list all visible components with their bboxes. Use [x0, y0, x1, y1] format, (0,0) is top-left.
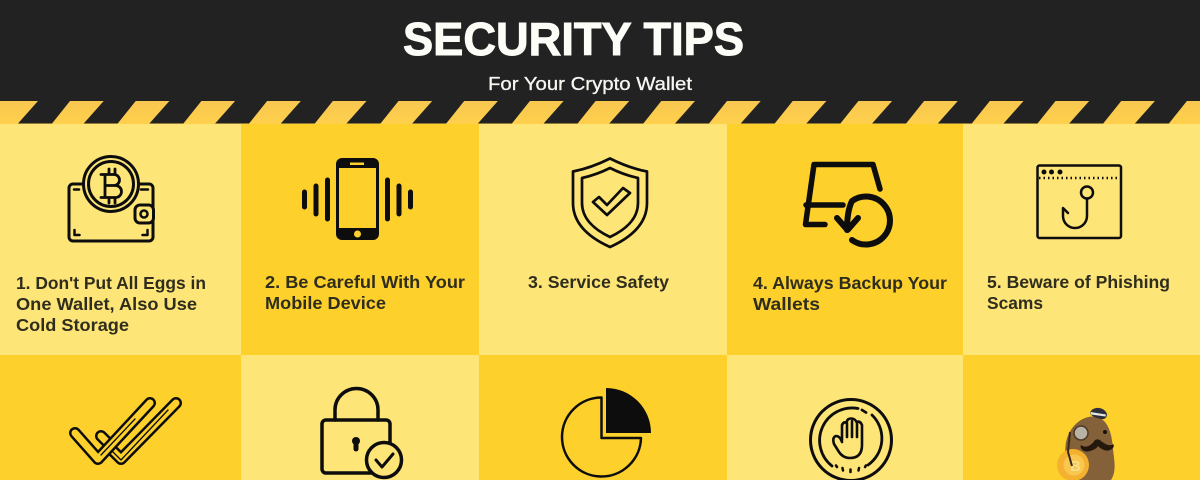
text: tip 1: One Wallet, Also Use	[16, 294, 197, 314]
panel: tip 4	[727, 124, 963, 355]
text: tip 2: Mobile Device	[265, 293, 386, 313]
hazard stripe band	[0, 101, 1200, 124]
text: tip 3: 3. Service Safety	[528, 272, 669, 292]
text: tip 5: Scams	[987, 293, 1043, 313]
panel: tip 1	[0, 124, 241, 355]
panel: tip 6	[0, 355, 241, 480]
text: tip 1	[16, 273, 206, 335]
panel: tip 8	[479, 355, 727, 480]
subtitle: For Your Crypto Wallet	[488, 73, 692, 94]
text: tip 1: 1. Don't Put All Eggs in	[16, 273, 206, 293]
panel: tip 7	[241, 355, 479, 480]
icon: phishing hook in browser window	[1038, 166, 1121, 238]
header band	[0, 0, 1200, 102]
icon: vibrating phone	[304, 158, 410, 240]
icon: pie chart	[562, 388, 651, 476]
icon: backup drive	[806, 164, 890, 245]
title: SECURITY TIPS	[403, 13, 744, 65]
icon: double check marks	[75, 403, 176, 460]
panel: tip 3	[479, 124, 727, 355]
icon: potato mascot with bitcoin	[1057, 408, 1115, 480]
panel: tip 5	[963, 124, 1200, 355]
text: tip 5	[987, 272, 1170, 313]
icon: bitcoin wallet	[69, 156, 154, 241]
text: tip 1: Cold Storage	[16, 315, 129, 335]
icon: stop hand in circle	[810, 400, 892, 480]
text: tip 2	[265, 272, 465, 313]
text: tip 4: Wallets	[753, 294, 820, 314]
panel: tip 10	[963, 355, 1200, 480]
panel: tip 2	[241, 124, 479, 355]
panel: tip 9	[727, 355, 963, 480]
icon: potato mascot with bitcoin: B	[1070, 458, 1081, 475]
text: tip 4: 4. Always Backup Your	[753, 273, 947, 293]
text: tip 2: 2. Be Careful With Your	[265, 272, 465, 292]
text: tip 4	[753, 273, 947, 314]
text: tip 5: 5. Beware of Phishing	[987, 272, 1170, 292]
icon: padlock with check	[322, 388, 402, 478]
icon: shield with check	[573, 158, 647, 247]
